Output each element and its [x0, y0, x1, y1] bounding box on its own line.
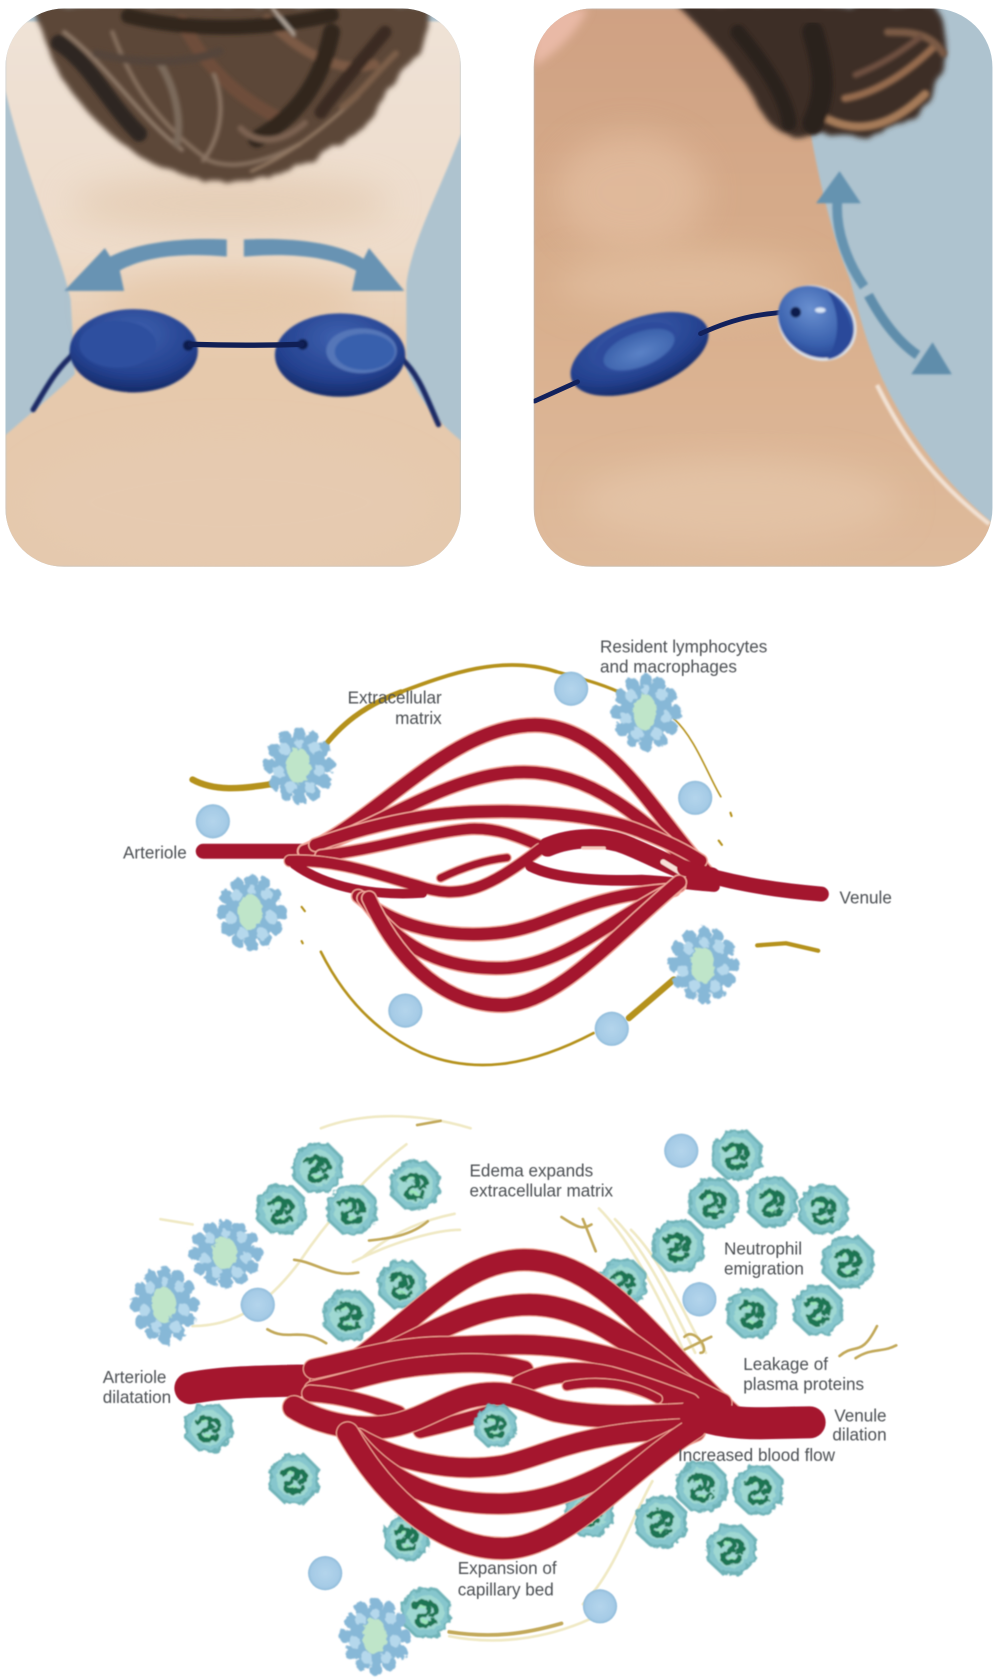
arrow: up	[816, 171, 864, 287]
panel: neck goggles rear view	[5, 4, 461, 567]
hair	[32, 4, 429, 182]
label: neutrophil emigration: emigration	[724, 1260, 804, 1279]
label: arteriole dilatation: Arteriole	[103, 1368, 166, 1387]
panel: neck goggles side view	[534, 4, 996, 567]
diagram: inflamed capillary bed	[103, 1116, 896, 1676]
label: arteriole dilatation: dilatation	[103, 1388, 171, 1407]
goggle: side near eyeshield	[568, 310, 710, 398]
label: venule dilation: dilation	[832, 1426, 887, 1445]
arrow: left	[64, 239, 227, 291]
arrow: down	[868, 295, 952, 374]
label: edema: Edema expands	[470, 1161, 593, 1180]
label: extracellular matrix: matrix	[395, 709, 442, 728]
label: venule dilation: Venule	[834, 1406, 887, 1425]
lymphocytes	[241, 1134, 717, 1623]
label: expansion of capillary bed: capillary bed	[458, 1581, 554, 1600]
goggle: left eyeshield	[70, 309, 198, 392]
label: venule: Venule	[840, 889, 892, 908]
label: resident lymphocytes: and macrophages	[600, 658, 737, 677]
arrow: right	[244, 239, 404, 291]
diagram: normal capillary bed	[123, 637, 892, 1065]
capillary loops	[203, 725, 821, 1005]
skin: neck and shoulder side	[534, 9, 996, 567]
cord	[190, 342, 302, 348]
cord side	[535, 311, 807, 401]
neutrophils behind vessels	[325, 1261, 645, 1559]
macrophages	[129, 1219, 411, 1676]
lymphocytes	[196, 672, 712, 1046]
label: resident lymphocytes: Resident lymphocytes	[600, 637, 767, 656]
oedematous matrix fibres	[160, 1116, 896, 1640]
skin: neck and shoulders	[5, 21, 461, 567]
label: edema: extracellular matrix	[470, 1182, 614, 1201]
label: neutrophil emigration: Neutrophil	[724, 1239, 802, 1258]
extracellular matrix fibres	[193, 665, 818, 1065]
hair: bun	[676, 4, 946, 138]
dilated capillary loops	[190, 1260, 810, 1549]
label: increased blood flow: Increased blood flow	[678, 1446, 836, 1465]
label: leakage: plasma proteins	[743, 1375, 864, 1394]
goggle: side far eyeshield	[776, 284, 858, 362]
neutrophils	[186, 1131, 873, 1636]
ear	[534, 9, 588, 66]
label: leakage: Leakage of	[743, 1355, 828, 1374]
label: extracellular matrix: Extracellular	[348, 689, 442, 708]
label: expansion of capillary bed: Expansion of	[458, 1559, 557, 1578]
goggle: right eyeshield	[275, 313, 405, 397]
label: arteriole: Arteriole	[123, 844, 187, 863]
straps	[33, 353, 439, 425]
macrophages	[215, 674, 740, 1004]
